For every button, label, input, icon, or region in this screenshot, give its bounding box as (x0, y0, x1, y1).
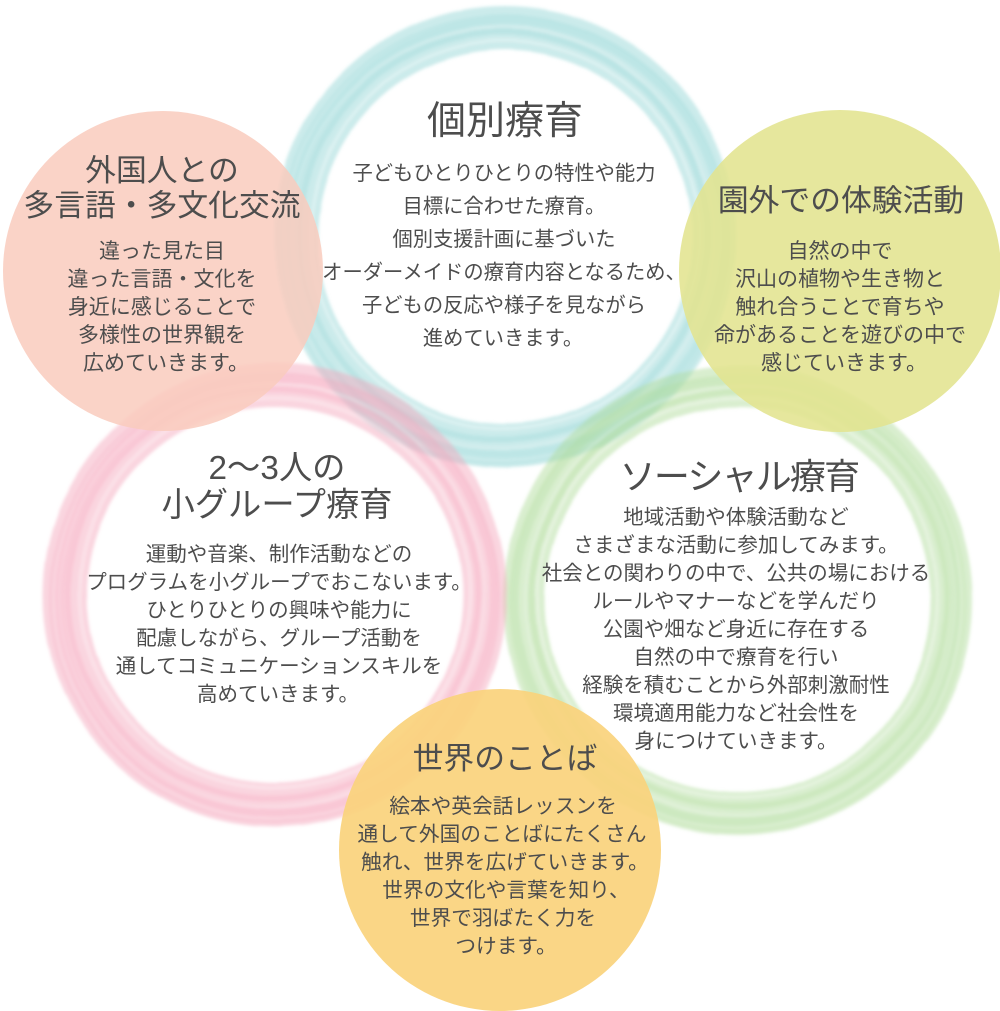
panel text: individual therapy: 子どもの反応や様子を見ながら (362, 294, 646, 317)
ring: green (510, 375, 966, 831)
panel text: social therapy: 自然の中で療育を行い (634, 646, 838, 669)
panel text: multilingual exchange (23, 153, 301, 375)
panel text: small group therapy (86, 450, 472, 706)
panel text: individual therapy: 個別支援計画に基づいた (392, 228, 616, 251)
panel text: social therapy (542, 456, 930, 753)
panel text: social therapy: 地域活動や体験活動など (623, 506, 849, 529)
circle: peach (3, 111, 323, 431)
panel text: world languages: 通して外国のことばにたくさん (357, 823, 647, 846)
panel text: social therapy: 身につけていきます。 (635, 730, 837, 753)
panel text: social therapy: 公園や畑など身近に存在する (603, 618, 869, 641)
panel text: social therapy: さまざまな活動に参加してみます。 (573, 533, 899, 557)
panel text: multilingual exchange: 違った見た目 (99, 240, 225, 263)
panel text: social therapy: ルールやマナーなどを学んだり (592, 590, 880, 613)
panel text: small group therapy: ひとりひとりの興味や能力に (146, 599, 412, 622)
panel text: multilingual exchange: 多言語・多文化交流 (23, 188, 301, 223)
panel text: social therapy: 社会との関わりの中で、公共の場における (542, 562, 930, 585)
ring: teal (281, 16, 729, 464)
panel text: social therapy: 環境適用能力など社会性を (613, 702, 859, 725)
panel text: individual therapy: 進めていきます。 (423, 327, 583, 350)
panel text: individual therapy: オーダーメイドの療育内容となるため、 (322, 261, 686, 284)
panel text: world languages: 絵本や英会話レッスンを (389, 795, 617, 818)
panel text: outdoor activities (714, 183, 966, 375)
circle: yellow-green (679, 110, 1000, 432)
panel text: multilingual exchange: 多様性の世界観を (78, 324, 246, 347)
panel text: small group therapy: 小グループ療育 (161, 487, 393, 524)
panel text: multilingual exchange: 違った言語・文化を (68, 268, 256, 291)
panel text: outdoor activities: 感じていきます。 (761, 352, 927, 375)
panel text: individual therapy: 目標に合わせた療育。 (403, 195, 605, 218)
ring: pink (51, 374, 499, 822)
panel text: small group therapy: 高めていきます。 (197, 683, 359, 706)
panel text: world languages: つけます。 (455, 935, 557, 958)
panel text: small group therapy: 2～3人の (209, 450, 345, 487)
panel text: world languages: 触れ、世界を広げていきます。 (361, 851, 649, 874)
panel text: social therapy: ソーシャル療育 (620, 456, 858, 497)
panel text: outdoor activities: 園外での体験活動 (718, 183, 964, 218)
panel text: outdoor activities: 自然の中で (788, 240, 892, 263)
panel text: individual therapy: 個別療育 (427, 100, 583, 143)
panel text: outdoor activities: 触れ合うことで育ちや (735, 296, 945, 319)
panel text: small group therapy: 配慮しながら、グループ活動を (136, 627, 422, 650)
panel text: multilingual exchange: 広めていきます。 (83, 352, 249, 375)
panel text: outdoor activities: 命があることを遊びの中で (714, 324, 966, 347)
panel text: multilingual exchange: 身近に感じることで (68, 296, 256, 319)
panel text: small group therapy: 運動や音楽、制作活動などの (146, 543, 412, 566)
circle: orange (339, 689, 661, 1011)
panel text: world languages: 世界で羽ばたく力を (410, 907, 596, 930)
panel text: world languages: 世界の文化や言葉を知り、 (382, 879, 630, 902)
panel text: small group therapy: 通してコミュニケーションスキルを (116, 655, 442, 678)
panel text: world languages (357, 741, 649, 958)
panel text: individual therapy: 子どもひとりひとりの特性や能力 (352, 162, 656, 185)
panel text: social therapy: 経験を積むことから外部刺激耐性 (582, 674, 890, 697)
panel text: individual therapy (322, 100, 686, 350)
panel text: world languages: 世界のことば (413, 741, 597, 776)
panel text: multilingual exchange: 外国人との (85, 153, 239, 188)
panel text: outdoor activities: 沢山の植物や生き物と (735, 268, 945, 291)
panel text: small group therapy: プログラムを小グループでおこないます。 (86, 571, 472, 594)
